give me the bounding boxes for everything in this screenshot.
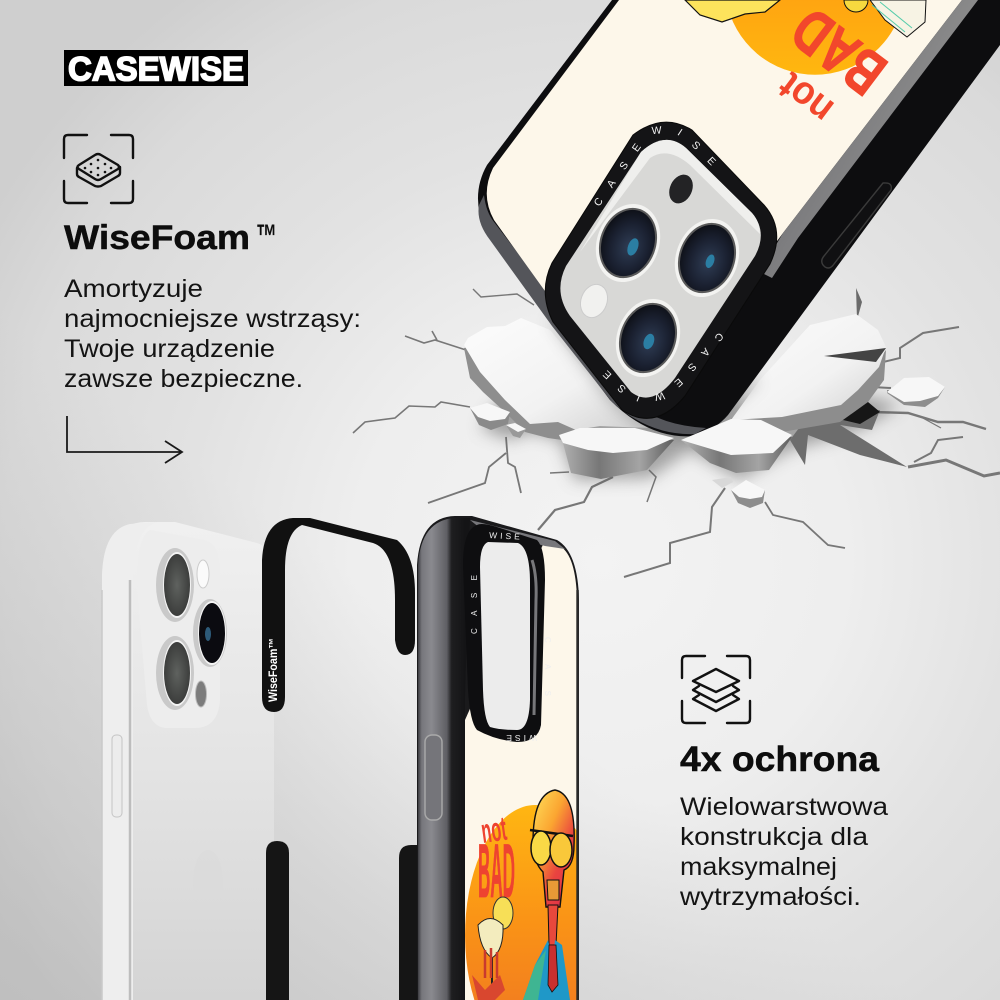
- flash: [576, 281, 612, 321]
- cream back panel: [487, 0, 962, 400]
- WiseFoam strip, top: WiseFoam™: [268, 638, 280, 702]
- ring opening: [480, 542, 530, 730]
- arrow: [67, 416, 182, 463]
- text block: 4x ochrona description: Wielowarstwowa: [680, 793, 888, 821]
- side button: [425, 735, 442, 820]
- camera plateau: [560, 140, 761, 398]
- artwork: lemon: [685, 0, 780, 22]
- side button: [112, 735, 122, 817]
- clear side band: [760, 0, 978, 278]
- microphone: [196, 681, 206, 707]
- heading: WiseFoam: ™: [256, 218, 277, 256]
- ring highlight: [532, 560, 536, 715]
- artwork: cocktail and hand: [472, 897, 513, 1000]
- case silhouette: [478, 0, 1000, 436]
- text block: 4x ochrona description: wytrzymałości.: [679, 883, 861, 911]
- artwork: glass rim: [844, 0, 926, 37]
- lens 1: [156, 548, 194, 622]
- text block: 4x ochrona description: maksymalnej: [680, 853, 837, 881]
- ring lettering, right: CAS: [543, 637, 552, 707]
- phone with case, top: [478, 0, 1000, 441]
- black case, front view: BAD: [478, 829, 515, 914]
- heading: WiseFoam: WiseFoam: [64, 219, 250, 257]
- artwork: skeleton: [523, 790, 574, 1000]
- ring lettering, left: CASE: [470, 564, 479, 634]
- shadow under slabs: [480, 395, 900, 480]
- silver phone, back: [102, 522, 274, 1000]
- rocks: left and bottom: [470, 403, 765, 508]
- cream panel: [465, 540, 577, 1000]
- icon: layers in frame: [682, 656, 750, 723]
- broken slab: centre left: [559, 428, 674, 479]
- WiseFoam strip, lower left: [266, 841, 289, 1000]
- text block: 4x ochrona description: konstrukcja dla: [680, 823, 868, 851]
- black case, front view: [417, 516, 579, 1000]
- lens 2: [193, 599, 227, 667]
- ring lettering, bottom: CASEWISE: [602, 334, 723, 402]
- text block: WiseFoam description: Amortyzuje: [64, 275, 203, 303]
- logo mark: [193, 850, 223, 914]
- WiseFoam strip, lower right: [399, 845, 420, 1000]
- metal side band: [418, 518, 470, 1000]
- phone shadow: [548, 318, 760, 436]
- logo: CASEWISE: CASEWISE: [68, 50, 244, 88]
- artwork: sun circle: [465, 805, 577, 1000]
- phone body: [102, 522, 274, 1000]
- case right rim: [576, 590, 579, 1000]
- artwork: not: not: [770, 64, 842, 132]
- camera plateau: [137, 530, 220, 728]
- broken slab: left: [464, 318, 650, 442]
- flash: [197, 560, 209, 588]
- artwork: not: not: [479, 810, 509, 851]
- lens 2: [664, 210, 750, 306]
- ring lettering, bottom: WISE: [503, 733, 537, 743]
- WiseFoam strip, top: [262, 518, 415, 712]
- text block: WiseFoam description: [64, 275, 361, 393]
- lower left clear bumper: [478, 195, 706, 434]
- text block: WiseFoam description: zawsze bezpieczne.: [64, 365, 303, 393]
- ring lettering, top: CASEWISE: [594, 126, 716, 206]
- microphone: [665, 171, 697, 207]
- text block: WiseFoam description: najmocniejsze wstrząsy:: [64, 305, 361, 333]
- broken slab: right: [731, 288, 886, 432]
- lens 1: [585, 195, 671, 291]
- camera ring: [545, 122, 777, 418]
- rock: right: [887, 377, 945, 407]
- side button: [822, 183, 891, 268]
- lens 3: [605, 290, 691, 386]
- camera ring: [463, 524, 545, 742]
- side frame: [102, 522, 158, 1000]
- broken slab: centre right: [681, 419, 792, 473]
- case silhouette: [417, 516, 579, 1000]
- icon: foam pad in frame: [64, 135, 133, 203]
- ring lettering, top: WISE: [489, 530, 523, 542]
- text block: WiseFoam description: Twoje urządzenie: [64, 335, 275, 363]
- artwork: sun circle: [726, 0, 904, 75]
- wall cracks: [353, 289, 1000, 577]
- lens 3: [156, 636, 194, 710]
- text block: 4x ochrona description: [679, 793, 888, 911]
- heading: 4x ochrona: 4x ochrona: [680, 740, 880, 779]
- crack wedge to the right: [790, 410, 907, 467]
